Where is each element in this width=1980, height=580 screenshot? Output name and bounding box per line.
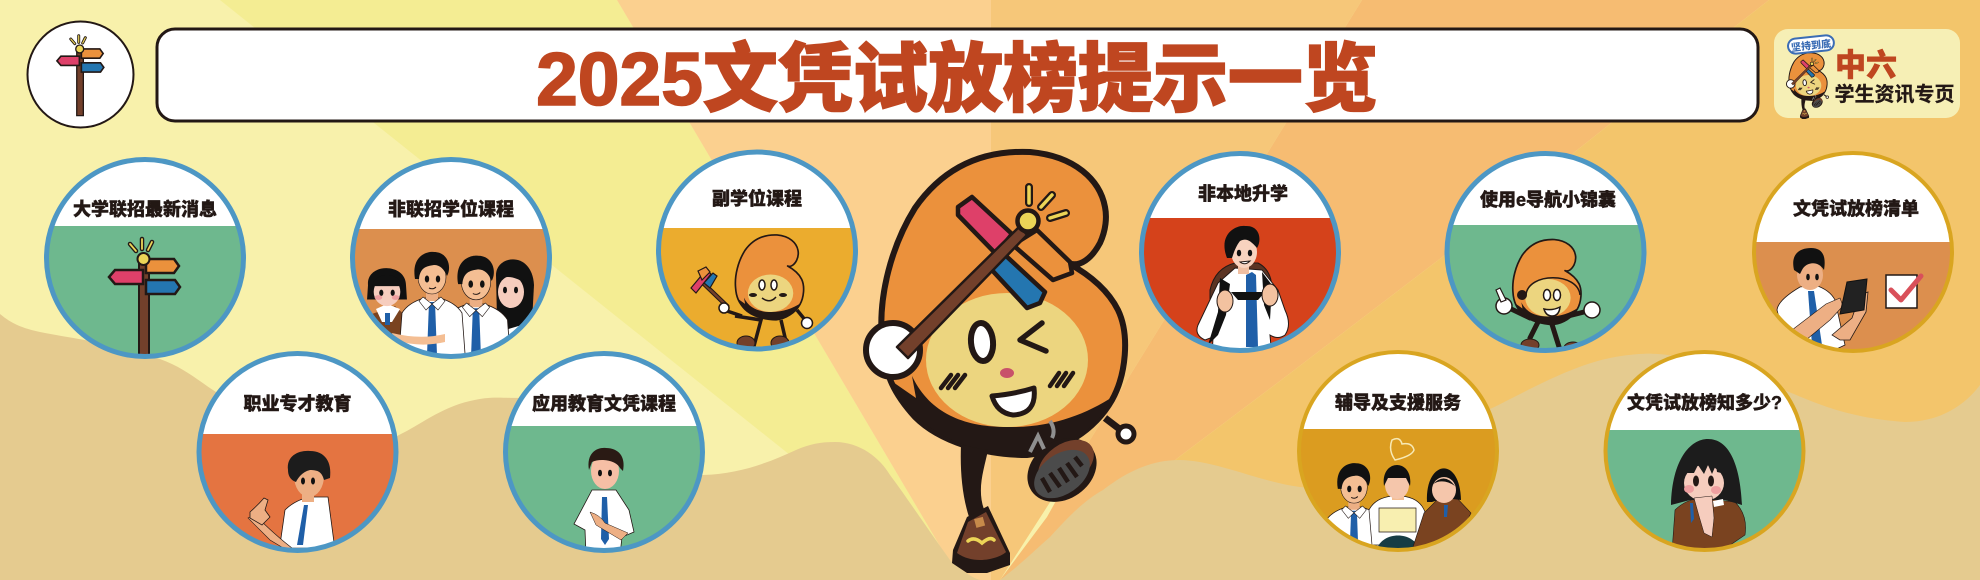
panel: 职业专才教育	[192, 353, 404, 559]
panel: 文凭试放榜知多少?	[1599, 352, 1811, 560]
panel: 副学位课程	[652, 152, 862, 358]
label: 职业专才教育	[244, 393, 352, 414]
panel: 非联招学位课程	[350, 157, 552, 359]
label: 应用教育文凭课程	[532, 393, 676, 414]
panel: 大学联招最新消息	[40, 159, 250, 366]
logo badge: 中六学生资讯专页: 学生资讯专页	[1834, 83, 1954, 106]
panel: 使用e导航小锦囊	[1440, 153, 1652, 360]
label: 副学位课程	[712, 188, 802, 209]
label: 大学联招最新消息	[73, 198, 217, 220]
logo badge: 中六学生资讯专页	[1774, 29, 1960, 119]
label: 使用e导航小锦囊	[1480, 189, 1616, 210]
label: 文凭试放榜清单	[1793, 198, 1919, 219]
panel: 辅导及支援服务	[1297, 350, 1499, 552]
label: 非联招学位课程	[388, 198, 514, 220]
logo badge: 中六学生资讯专页: 坚持到底	[1790, 37, 1832, 54]
logo badge: 中六学生资讯专页: 中六	[1835, 48, 1897, 83]
title bar	[157, 29, 1758, 121]
title text: 2025文凭试放榜提示一览	[536, 37, 1378, 121]
panel: 非本地升学	[1135, 153, 1345, 358]
panel: 应用教育文凭课程	[499, 353, 709, 561]
label: 非本地升学	[1198, 183, 1288, 204]
panel: big mascot	[866, 152, 1136, 573]
label: 辅导及支援服务	[1335, 392, 1461, 413]
panel: 文凭试放榜清单	[1748, 153, 1958, 362]
icon: header signpost badge	[28, 22, 134, 128]
label: 文凭试放榜知多少?	[1627, 392, 1782, 413]
